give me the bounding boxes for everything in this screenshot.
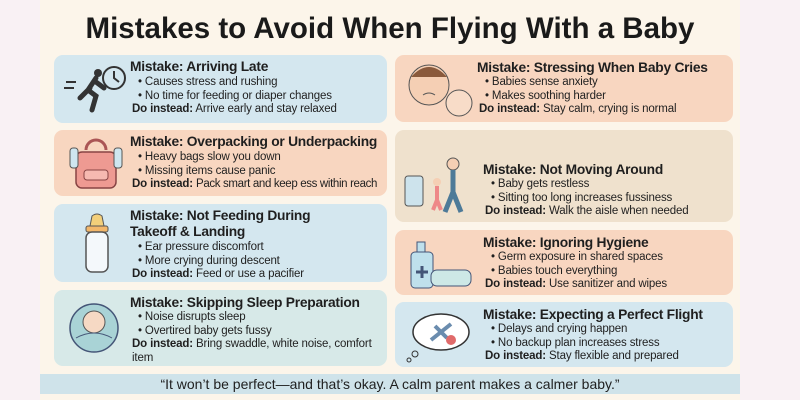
- panel: arriving late: Do instead: Arrive early and stay relaxed: [132, 103, 337, 115]
- panel: hygiene: Do instead: Use sanitizer and wipes: [485, 278, 667, 290]
- icon: parent walking aisle: [404, 158, 464, 213]
- panel: not moving: Mistake: Not Moving Around: [483, 162, 663, 177]
- panel: hygiene: [395, 230, 733, 295]
- panel: overpacking: Do instead: Pack smart and keep ess within reach: [132, 178, 377, 190]
- panel: not moving: [395, 130, 733, 222]
- panel: not feeding: • More crying during descent: [138, 254, 280, 266]
- panel: not feeding: Mistake: Not Feeding During: [130, 208, 310, 223]
- panel: stressing: [395, 55, 733, 122]
- panel: sleep prep: • Noise disrupts sleep: [138, 311, 245, 323]
- panel: not moving: • Sitting too long increases fussiness: [491, 192, 672, 204]
- panel: perfect flight: Do instead: Stay flexible and prepared: [485, 350, 679, 362]
- panel: hygiene: • Germ exposure in shared spaces: [491, 251, 663, 263]
- panel: not moving: • Baby gets restless: [491, 178, 589, 190]
- icon: worried parent and baby: [408, 64, 472, 116]
- panel: overpacking: • Heavy bags slow you down: [138, 151, 281, 163]
- panel: arriving late: Mistake: Arriving Late: [130, 59, 268, 74]
- panel: sleep prep: item: [132, 352, 153, 364]
- panel: sleep prep: Do instead: Bring swaddle, white noise, comfort: [132, 338, 372, 350]
- icon: baby bottle: [85, 214, 109, 273]
- panel: not feeding: • Ear pressure discomfort: [138, 241, 264, 253]
- panel: stressing: Do instead: Stay calm, crying is normal: [479, 103, 676, 115]
- title: Mistakes to Avoid When Flying With a Baby: [86, 12, 694, 45]
- panel: arriving late: • No time for feeding or diaper changes: [138, 90, 332, 102]
- quote bar: [40, 374, 740, 394]
- panel: perfect flight: Mistake: Expecting a Perfect Flight: [483, 307, 703, 322]
- panel: perfect flight: • Delays and crying happen: [491, 323, 627, 335]
- panel: perfect flight: [395, 302, 733, 367]
- panel: stressing: • Makes soothing harder: [485, 90, 606, 102]
- icon: sanitizer and wipes: [410, 242, 472, 288]
- panel: hygiene: • Babies touch everything: [491, 264, 617, 276]
- panel: not feeding: Do instead: Feed or use a pacifier: [132, 268, 304, 280]
- panel: arriving late: [54, 55, 387, 123]
- quote bar: “It won’t be perfect—and that’s okay. A calm parent makes a calmer baby.”: [160, 376, 620, 392]
- icon: runner clock: [64, 66, 126, 112]
- icon: thought cloud plane: [406, 313, 470, 362]
- panel: not feeding: [54, 204, 387, 282]
- panel: sleep prep: [54, 290, 387, 366]
- panel: sleep prep: Mistake: Skipping Sleep Preparation: [130, 295, 360, 310]
- icon: diaper bag: [70, 138, 122, 189]
- panel: not moving: Do instead: Walk the aisle when needed: [485, 205, 689, 217]
- panel: hygiene: Mistake: Ignoring Hygiene: [483, 235, 648, 250]
- panel: overpacking: • Missing items cause panic: [138, 164, 275, 176]
- icon: swaddled baby: [69, 303, 119, 353]
- panel: not feeding: Takeoff & Landing: [130, 224, 245, 239]
- panel: overpacking: [54, 130, 387, 196]
- panel: perfect flight: • No backup plan increases stress: [491, 336, 659, 348]
- panel: overpacking: Mistake: Overpacking or Underpacking: [130, 134, 377, 149]
- panel: arriving late: • Causes stress and rushing: [138, 76, 277, 88]
- panel: sleep prep: • Overtired baby gets fussy: [138, 324, 272, 336]
- panel: stressing: • Babies sense anxiety: [485, 76, 598, 88]
- panel: stressing: Mistake: Stressing When Baby Cries: [477, 60, 708, 75]
